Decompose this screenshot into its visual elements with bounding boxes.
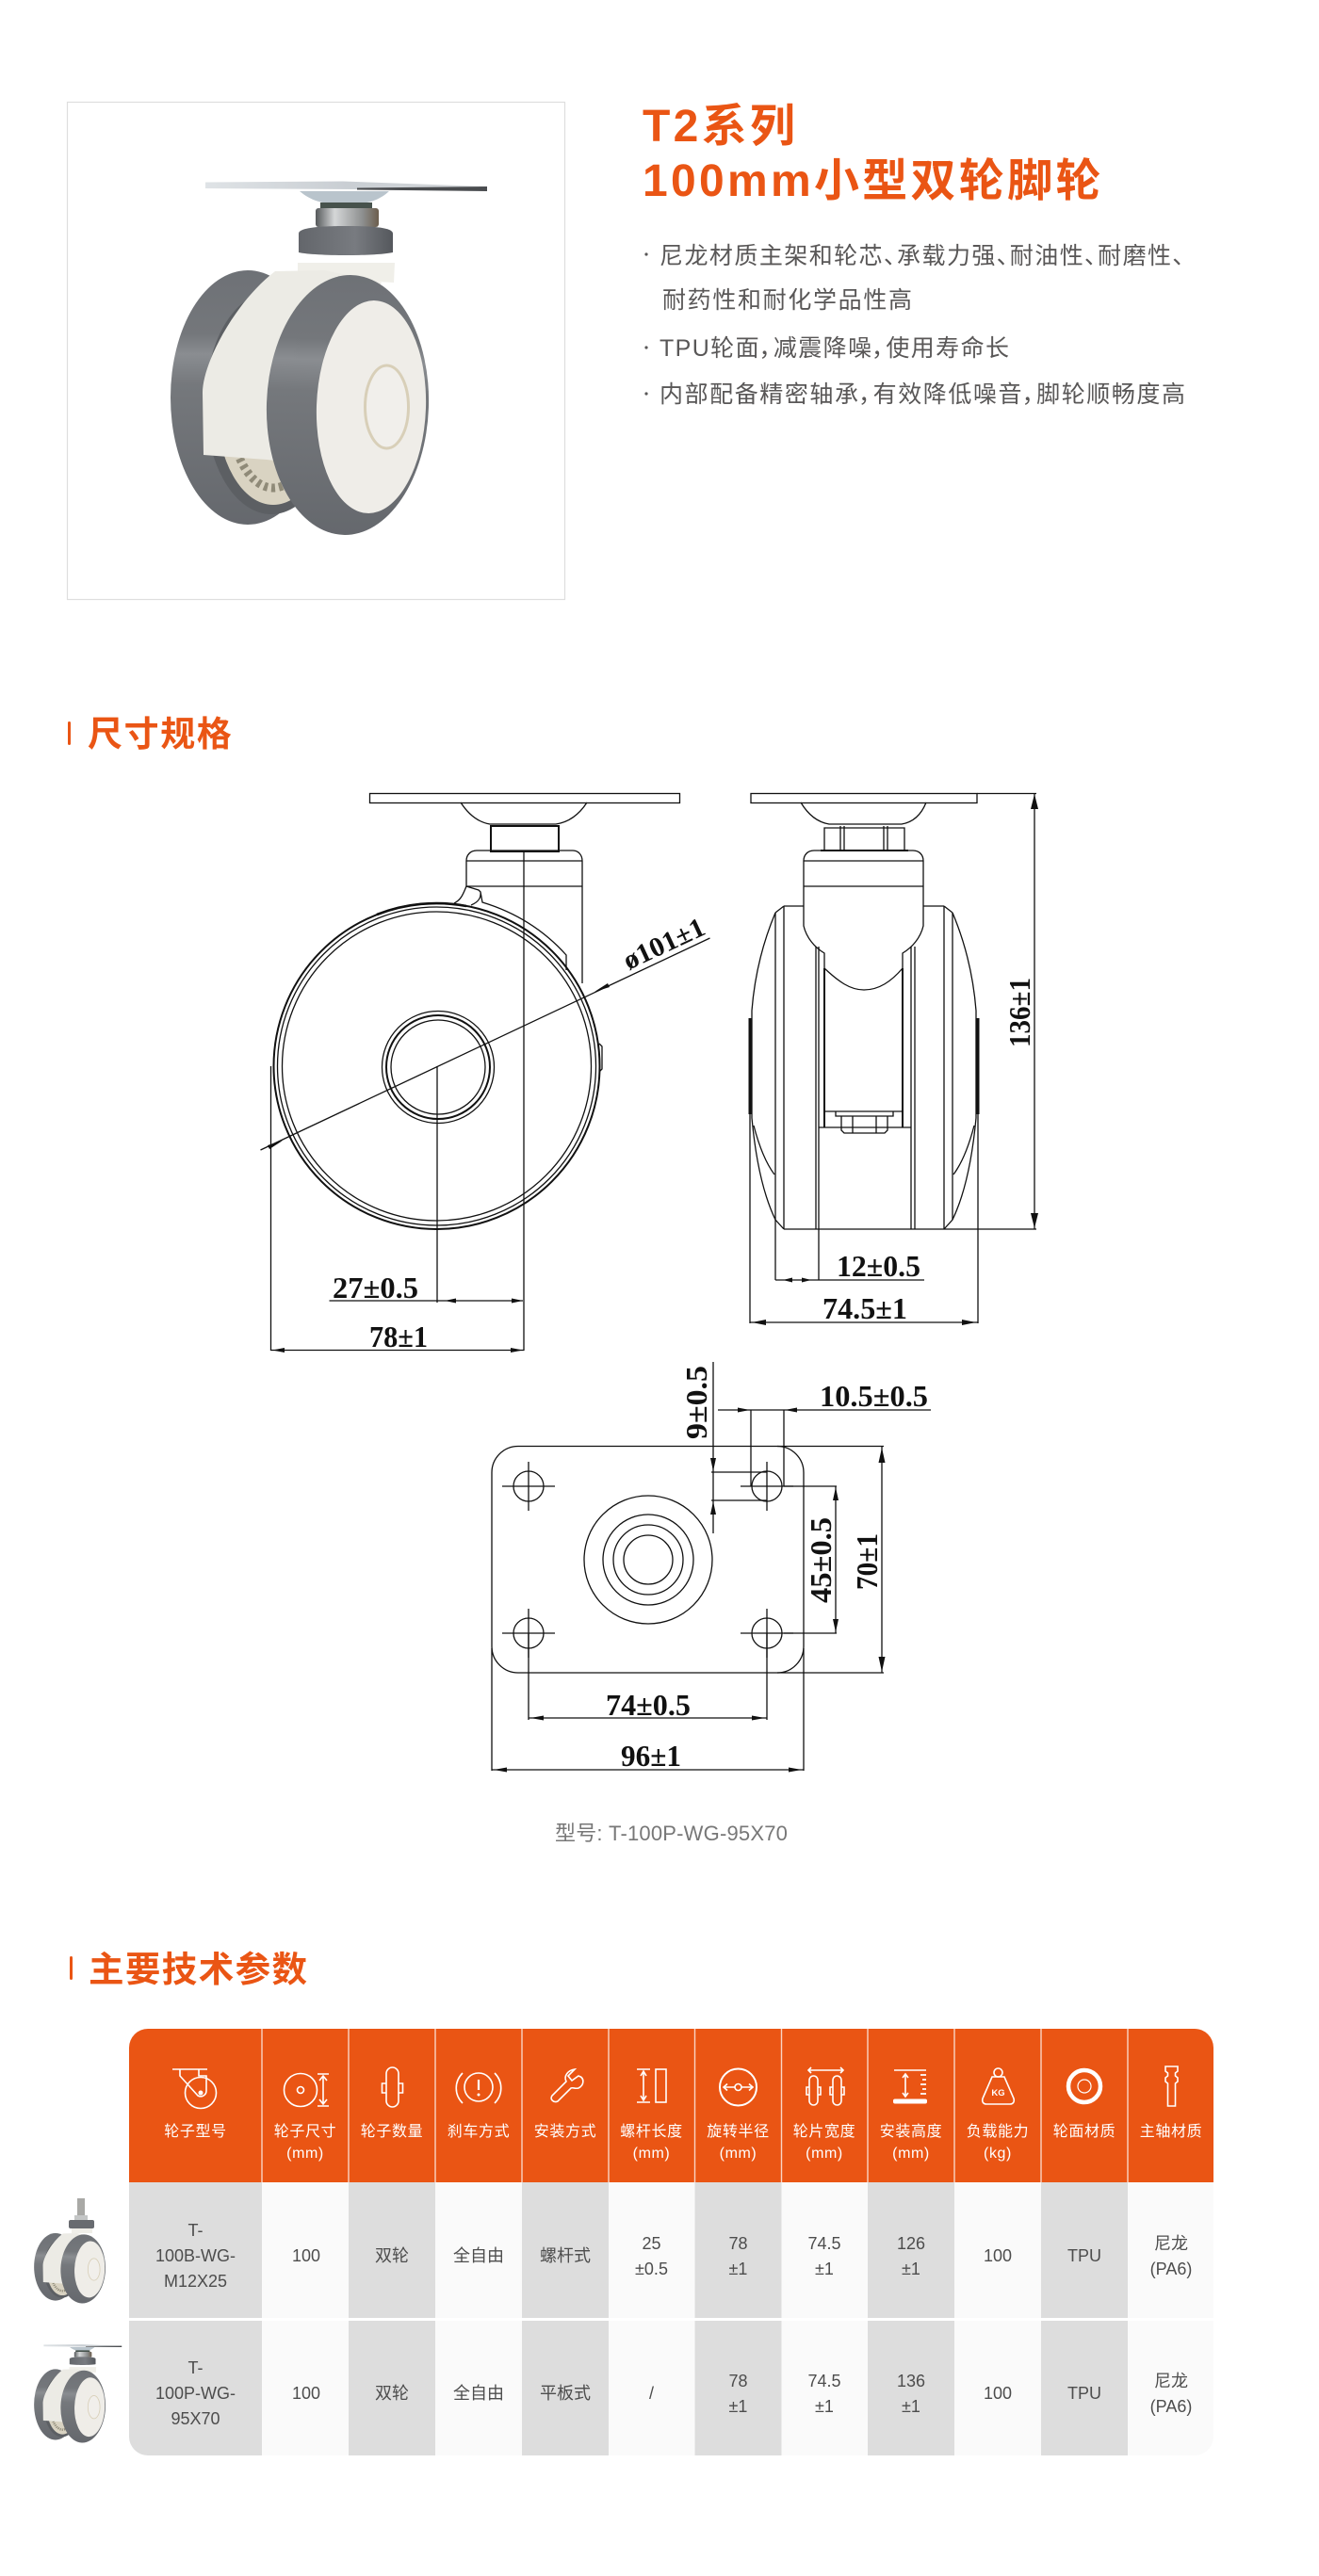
heading: dimensions: 尺寸规格 (88, 715, 233, 753)
feature list: TPU轮面，减震降噪，使用寿命长 (660, 335, 1009, 362)
row: T-100P-WG-95X70: 136 (897, 2372, 925, 2390)
header labels: (mm) (806, 2146, 843, 2162)
header labels: 轮子尺寸 (274, 2123, 336, 2140)
row: T-100B-WG-M12X25: TPU (1067, 2246, 1101, 2265)
parameter table (129, 2029, 1213, 2455)
drawing: mounting plate (492, 1362, 931, 1773)
title: T2系列 (643, 102, 798, 152)
row: T-100B-WG-M12X25: 74.5 (807, 2234, 841, 2253)
dimension labels: 10.5±0.5 (820, 1379, 928, 1413)
header labels: 安装高度 (880, 2123, 942, 2140)
header labels: 螺杆长度 (620, 2123, 683, 2140)
icon: mounting height (893, 2070, 927, 2104)
title: 100mm小型双轮脚轮 (643, 156, 1104, 206)
row: T-100P-WG-95X70: 尼龙 (1154, 2372, 1188, 2390)
row: T-100B-WG-M12X25: M12X25 (164, 2272, 227, 2291)
feature list (644, 243, 1185, 408)
header labels: 轮片宽度 (793, 2123, 855, 2140)
dimension labels: 74±0.5 (606, 1688, 691, 1722)
row: T-100B-WG-M12X25: 螺杆式 (540, 2246, 591, 2265)
feature list: 耐药性和耐化学品性高 (662, 287, 912, 314)
dimension labels: ø101±1 (618, 912, 709, 976)
header labels: 轮面材质 (1053, 2123, 1115, 2140)
row: T-100B-WG-M12X25: (PA6) (1150, 2260, 1192, 2278)
row: T-100B-WG-M12X25: 100 (984, 2246, 1012, 2265)
row: T-100P-WG-95X70: / (649, 2384, 654, 2403)
dimension labels: 78±1 (369, 1320, 428, 1353)
row: T-100P-WG-95X70: (PA6) (1150, 2397, 1192, 2416)
title (643, 102, 1104, 206)
header labels: (kg) (984, 2146, 1012, 2162)
icon: tread material (1068, 2070, 1100, 2102)
header labels: 轮子型号 (164, 2123, 227, 2140)
icon: brake (456, 2073, 501, 2103)
table body background (129, 2182, 1213, 2455)
row: T-100P-WG-95X70: 74.5 (807, 2372, 841, 2390)
icon: wheel quantity (383, 2067, 403, 2107)
caption: model number: 型号: T-100P-WG-95X70 (555, 1822, 788, 1845)
thumbnail: threaded stem caster (34, 2198, 106, 2304)
row: T-100B-WG-M12X25: 126 (897, 2234, 925, 2253)
row: T-100B-WG-M12X25: 双轮 (375, 2246, 409, 2265)
row: T-100B-WG-M12X25: ±1 (902, 2260, 920, 2278)
dimension labels: 96±1 (621, 1739, 681, 1773)
dimension labels: 12±0.5 (837, 1249, 920, 1283)
row: T-100P-WG-95X70: 平板式 (540, 2384, 591, 2403)
icon: wheel size (285, 2074, 329, 2106)
header labels: (mm) (633, 2146, 670, 2162)
dimension labels: 136±1 (1002, 978, 1036, 1047)
feature list: 内部配备精密轴承，有效降低噪音，脚轮顺畅度高 (660, 381, 1185, 408)
row: T-100P-WG-95X70: ±1 (902, 2397, 920, 2416)
thumbnail: plate caster (34, 2344, 122, 2443)
row: T-100B-WG-M12X25: ±1 (815, 2260, 834, 2278)
icon: caster (172, 2069, 217, 2108)
header labels: 刹车方式 (448, 2123, 510, 2140)
row: T-100B-WG-M12X25: 尼龙 (1154, 2234, 1188, 2253)
row: T-100P-WG-95X70: 全自由 (453, 2384, 504, 2403)
row: T-100B-WG-M12X25: 100B-WG- (155, 2246, 236, 2265)
row: T-100P-WG-95X70: 双轮 (375, 2384, 409, 2403)
panel: product photo frame (68, 102, 565, 599)
row: T-100P-WG-95X70: 100 (292, 2384, 320, 2403)
icon: KG label: KG (991, 2088, 1005, 2098)
drawing: side view (260, 793, 710, 1353)
row: T-100P-WG-95X70: 95X70 (171, 2409, 220, 2428)
header labels: (mm) (720, 2146, 757, 2162)
header labels: 主轴材质 (1140, 2123, 1202, 2140)
row: T-100P-WG-95X70 (155, 2358, 1192, 2428)
row: T-100P-WG-95X70: 100P-WG- (155, 2384, 236, 2403)
feature list: 尼龙材质主架和轮芯、承载力强、耐油性、耐磨性、 (660, 243, 1184, 269)
row: T-100P-WG-95X70: ±1 (815, 2397, 834, 2416)
dimension labels: 45±0.5 (804, 1517, 838, 1603)
header labels: (mm) (286, 2146, 324, 2162)
icon: wheel width (806, 2067, 844, 2105)
row: T-100P-WG-95X70: 100 (984, 2384, 1012, 2403)
dimension labels: 9±0.5 (679, 1366, 713, 1439)
drawing: front view (750, 793, 1038, 1325)
row: T-100B-WG-M12X25: 78 (728, 2234, 748, 2253)
header labels: 负载能力 (967, 2123, 1029, 2140)
row: T-100B-WG-M12X25: ±1 (729, 2260, 747, 2278)
row: T-100B-WG-M12X25: 25 (642, 2234, 661, 2253)
row: T-100B-WG-M12X25 (155, 2221, 1192, 2291)
row: T-100P-WG-95X70: TPU (1067, 2384, 1101, 2403)
table header (129, 2029, 1213, 2182)
header labels: 安装方式 (534, 2123, 596, 2140)
dimension labels: 74.5±1 (822, 1291, 907, 1325)
dimension labels (606, 1366, 928, 1773)
row: T-100B-WG-M12X25: ±0.5 (635, 2260, 668, 2278)
row: T-100B-WG-M12X25: 全自由 (453, 2246, 504, 2265)
header labels: (mm) (892, 2146, 930, 2162)
header labels: 旋转半径 (707, 2123, 770, 2140)
dimension labels: 27±0.5 (333, 1271, 418, 1304)
icon: spindle material (1165, 2066, 1178, 2106)
row: T-100P-WG-95X70: ±1 (729, 2397, 747, 2416)
icon: wrench (551, 2069, 583, 2102)
dimension labels: 70±1 (850, 1533, 884, 1590)
product photo: caster wheel (171, 181, 487, 538)
row: T-100B-WG-M12X25: T- (188, 2221, 204, 2240)
row: T-100B-WG-M12X25: 100 (292, 2246, 320, 2265)
row: T-100P-WG-95X70: T- (188, 2358, 204, 2377)
header labels (164, 2123, 1202, 2162)
dimension labels (822, 978, 1036, 1325)
dimension labels (333, 912, 709, 1353)
icon: load weight (983, 2068, 1014, 2104)
heading: main technical parameters: 主要技术参数 (89, 1950, 308, 1989)
icon: screw length (637, 2069, 666, 2102)
header labels: 轮子数量 (361, 2123, 423, 2140)
row: T-100P-WG-95X70: 78 (728, 2372, 748, 2390)
icon: swivel radius (720, 2068, 757, 2106)
